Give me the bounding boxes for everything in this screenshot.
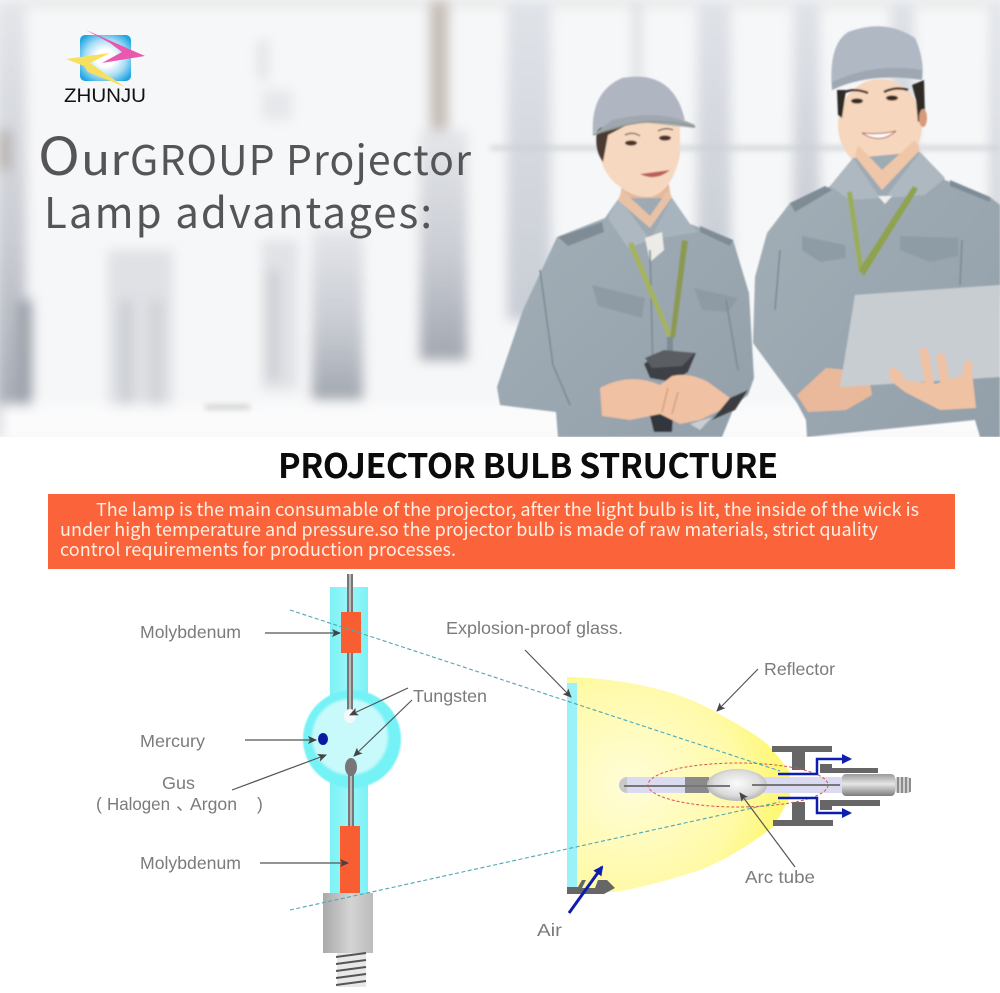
- heading: hero title: ur: [81, 127, 130, 188]
- heading: hero title: Lamp advantages:: [44, 180, 432, 241]
- heading: hero title: GROUP Projector: [130, 127, 471, 187]
- heading: hero title: O: [38, 115, 80, 190]
- heading: projector bulb structure: PROJECTOR BULB STRUCTURE: [278, 439, 778, 488]
- diagram labels: Air: [537, 920, 562, 940]
- diagram: bulb structure: [96, 574, 911, 987]
- diagram labels: [96, 618, 835, 940]
- man with laptop: [753, 26, 1000, 437]
- diagram labels: 、: [176, 794, 194, 814]
- diagram labels: Reflector: [764, 659, 835, 679]
- diagram labels: Halogen: [107, 794, 170, 814]
- woman with barcode scanner: [497, 77, 754, 437]
- panel: orange intro banner: [48, 494, 955, 569]
- blurred office background: [0, 0, 1000, 437]
- panel: orange intro banner: control requirements for production processes.: [60, 536, 456, 562]
- diagram labels: Gus: [162, 773, 195, 793]
- diagram labels: Argon: [190, 794, 237, 814]
- diagram labels: (: [96, 794, 102, 814]
- diagram labels: Explosion-proof glass.: [446, 618, 623, 638]
- panel: orange intro banner: under high temperature and pressure.so the projector bulb is made of raw materials, strict quality: [60, 516, 879, 542]
- lamp: right reflector assembly: [567, 677, 911, 894]
- arrows and callout leaders: [232, 633, 795, 913]
- diagram labels: ): [257, 794, 263, 814]
- heading: hero title: [38, 115, 471, 241]
- logo: ZHUNJU: [64, 30, 146, 107]
- diagram labels: Molybdenum: [140, 853, 241, 873]
- diagram labels: Mercury: [140, 731, 205, 751]
- icon: lightning logo: [66, 30, 145, 87]
- lamp: left lamp cross-section: [303, 574, 401, 987]
- diagram labels: Molybdenum: [140, 622, 241, 642]
- panel: orange intro banner: The lamp is the main consumable of the projector, after the light bulb is lit, the inside of the wick is: [96, 496, 919, 522]
- lamps and rays: [290, 574, 911, 987]
- diagram labels: Tungsten: [413, 686, 487, 706]
- panel: hero office photo: [0, 0, 1000, 437]
- logo: ZHUNJU: ZHUNJU: [64, 86, 146, 107]
- diagram labels: Arc tube: [745, 867, 815, 887]
